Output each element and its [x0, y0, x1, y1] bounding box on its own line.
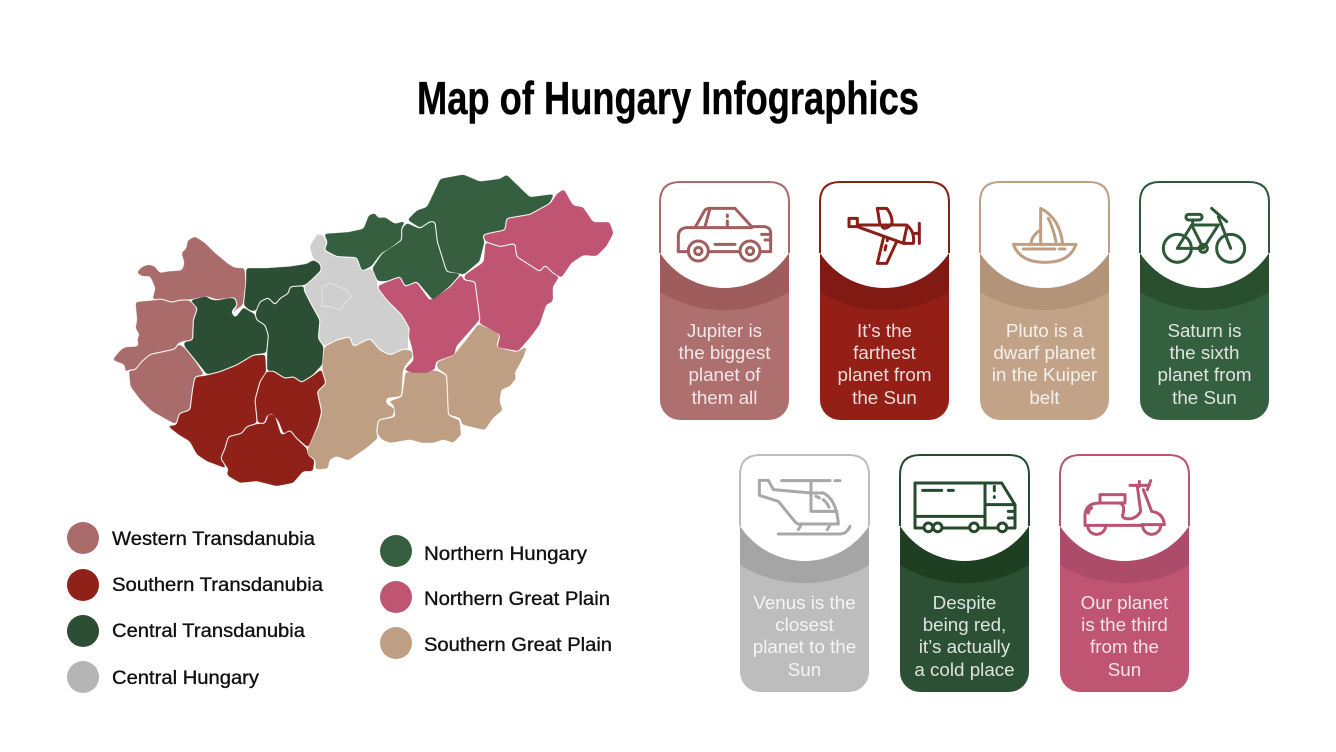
map of Hungary: [112, 174, 614, 487]
card text: the Sun: [852, 387, 917, 408]
icon: scooter: [1085, 481, 1164, 534]
card text: planet from: [1158, 364, 1251, 385]
legend item: Northern Great Plain: Northern Great Plain: [424, 588, 610, 610]
legend item: Central Hungary: Central Hungary: [112, 667, 259, 689]
card text: the biggest: [679, 342, 771, 363]
region: Western Transdanubia: [112, 236, 246, 425]
card text: belt: [1029, 387, 1060, 408]
icon: car: [678, 208, 771, 261]
card: scooter: [1060, 455, 1189, 692]
card text: Sun: [1108, 659, 1141, 680]
legend item: Southern Transdanubia: Southern Transdanubia: [112, 574, 323, 596]
card text: being red,: [923, 614, 1006, 635]
legend: [67, 522, 612, 693]
legend item: Southern Transdanubia: [67, 569, 323, 601]
card text: planet from: [838, 364, 931, 385]
legend item: Northern Hungary: Northern Hungary: [424, 543, 587, 565]
legend item: Northern Great Plain: [380, 581, 610, 613]
card text: the sixth: [1170, 342, 1239, 363]
card text: Pluto is a: [1006, 320, 1084, 341]
legend item: Northern Hungary: [380, 535, 587, 567]
region: Northern Hungary: [323, 174, 555, 301]
card: truck: [900, 455, 1029, 692]
legend item: Southern Great Plain: Southern Great Plain: [424, 634, 612, 656]
card text: from the: [1090, 636, 1159, 657]
card text: planet of: [688, 364, 761, 385]
legend item: Southern Great Plain: [380, 627, 612, 659]
icon: sailboat: [1013, 208, 1076, 262]
card text: planet to the: [753, 636, 856, 657]
card: car: [660, 182, 789, 420]
legend item: Western Transdanubia: Western Transdanubia: [112, 528, 315, 550]
title: Map of Hungary Infographics: [417, 72, 919, 124]
card text: it’s actually: [919, 636, 1011, 657]
region: Southern Great Plain: [307, 323, 528, 470]
region: Central Transdanubia: [183, 259, 324, 382]
card text: in the Kuiper: [992, 364, 1097, 385]
icon: bicycle: [1163, 208, 1245, 262]
legend item: Central Transdanubia: Central Transdanubia: [112, 620, 305, 642]
card text: Venus is the: [753, 592, 856, 613]
legend item: Western Transdanubia: [67, 522, 315, 554]
card text: them all: [692, 387, 757, 408]
card: sailboat: [980, 182, 1109, 420]
card text: Saturn is: [1167, 320, 1242, 341]
card text: farthest: [853, 342, 917, 363]
card text: It’s the: [857, 320, 912, 341]
card text: Despite: [933, 592, 996, 613]
card text: Jupiter is: [687, 320, 762, 341]
card text: a cold place: [914, 659, 1015, 680]
legend item: Central Hungary: [67, 661, 259, 693]
card text: is the third: [1081, 614, 1168, 635]
card text: Our planet: [1081, 592, 1169, 613]
region: Central Hungary: [304, 234, 412, 355]
card: plane: [820, 182, 949, 420]
card text: the Sun: [1172, 387, 1237, 408]
icon: plane: [849, 208, 919, 263]
card text: closest: [775, 614, 835, 635]
card text: dwarf planet: [993, 342, 1096, 363]
region: Northern Great Plain: [377, 188, 614, 373]
card text: Sun: [788, 659, 821, 680]
region: Southern Transdanubia: [166, 354, 326, 487]
card: bicycle: [1140, 182, 1269, 420]
legend item: Central Transdanubia: [67, 615, 305, 647]
icon: helicopter: [759, 480, 850, 534]
icon: truck: [915, 483, 1015, 532]
card: helicopter: [740, 455, 869, 692]
